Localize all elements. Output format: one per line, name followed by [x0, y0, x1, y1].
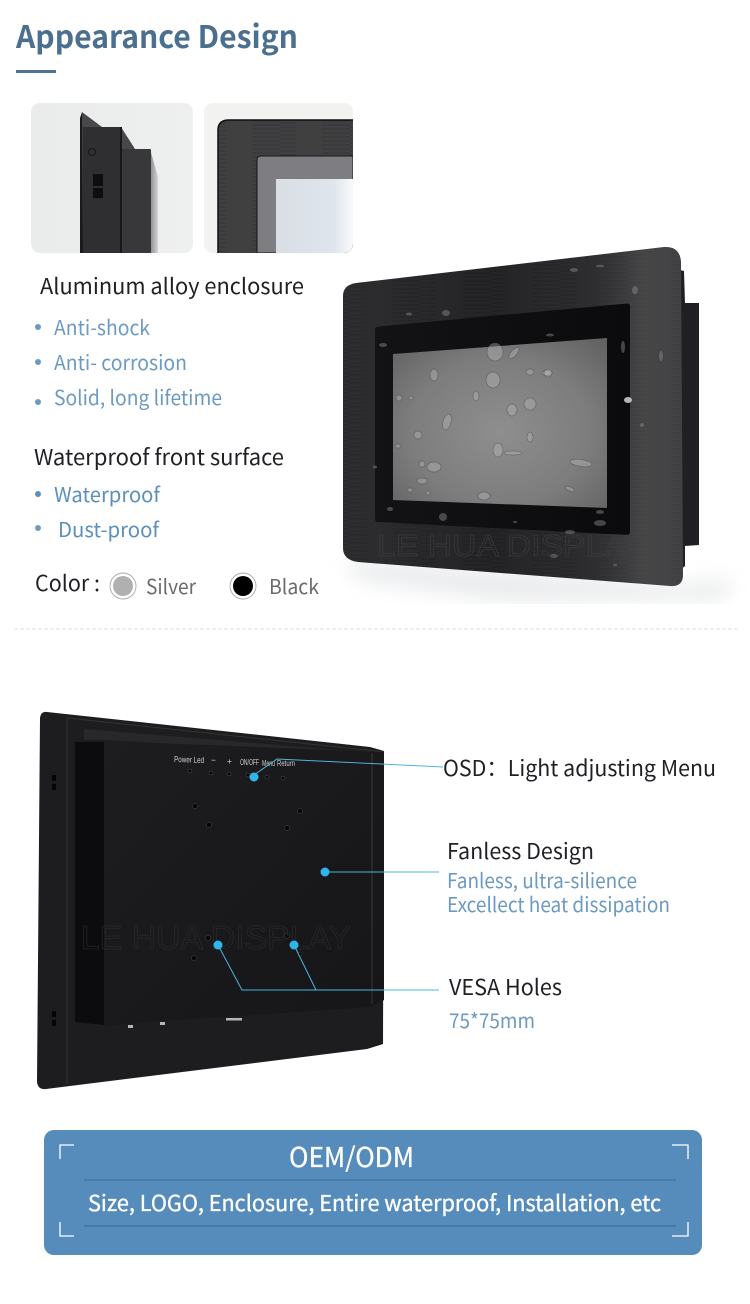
dashed divider [14, 628, 738, 630]
label: OSD: OSD：Light adjusting Menu [443, 751, 716, 783]
text block: aluminum alloy enclosure: Anti-shock [54, 311, 151, 341]
watermark: LE HUA DISPLAY [81, 919, 351, 956]
callout lines and dots [214, 759, 443, 990]
label: VESA holes: VESA Holes [449, 970, 562, 1002]
button labels [174, 754, 295, 768]
rear monitor outer flange [37, 712, 384, 1089]
color options: Black [269, 570, 320, 600]
color options: Silver [146, 570, 196, 600]
label: VESA holes [449, 970, 562, 1034]
text block: waterproof front surface: Dust-proof [58, 513, 160, 543]
monitor screen [393, 338, 607, 508]
text block: aluminum alloy enclosure: Aluminum alloy enclosure [40, 269, 304, 301]
bottom connectors [128, 1018, 242, 1028]
droplets on frame [373, 265, 663, 566]
monitor shadow [345, 560, 735, 600]
label: fanless design: Fanless, ultra-silience [447, 864, 637, 894]
button labels: Menu [262, 758, 275, 768]
mounting holes [192, 804, 302, 960]
label: fanless design: Fanless Design [447, 834, 594, 866]
banner text: Size, LOGO, Enclosure, Entire waterproof, Installation, etc [88, 1186, 661, 1218]
text block: waterproof front surface: Waterproof [54, 478, 161, 508]
side vents [52, 775, 56, 1026]
photo: side view of enclosure [31, 103, 193, 253]
label: fanless design: Excellect heat dissipation [447, 888, 670, 918]
button labels: ON/OFF [240, 757, 259, 767]
color options: Color : [35, 566, 100, 598]
button labels: Return [277, 758, 295, 768]
monitor brushed frame [343, 247, 683, 586]
text block: aluminum alloy enclosure: Anti- corrosion [54, 346, 187, 376]
button labels: − [211, 755, 216, 765]
text block: waterproof front surface [34, 440, 284, 543]
rear monitor frame edge [66, 717, 68, 1084]
corner brackets [60, 1145, 688, 1236]
banner heading: OEM/ODM [289, 1136, 414, 1175]
color options [35, 566, 320, 600]
waterproof front monitor [343, 247, 735, 600]
water droplets [395, 343, 592, 500]
rear monitor [37, 712, 384, 1089]
photo: corner of front bezel [204, 103, 353, 253]
OEM/ODM banner [44, 1130, 702, 1255]
text block: waterproof front surface: Waterproof front surface [34, 440, 284, 472]
rear monitor recess [75, 742, 104, 1025]
rear monitor back plate [104, 741, 384, 1026]
button labels: Power Led [174, 754, 204, 765]
label: fanless design [447, 834, 670, 918]
title: Appearance Design [15, 12, 298, 57]
watermark: LE HUA DISPLAY [377, 528, 647, 563]
monitor rear housing [680, 270, 699, 570]
button holes [188, 769, 285, 780]
banner rules [84, 1180, 676, 1226]
text block: aluminum alloy enclosure: Solid, long lifetime [54, 381, 222, 411]
monitor black bezel [375, 304, 630, 535]
button labels: + [227, 756, 232, 766]
text block: aluminum alloy enclosure [35, 269, 304, 411]
label: VESA holes: 75*75mm [449, 1004, 535, 1034]
